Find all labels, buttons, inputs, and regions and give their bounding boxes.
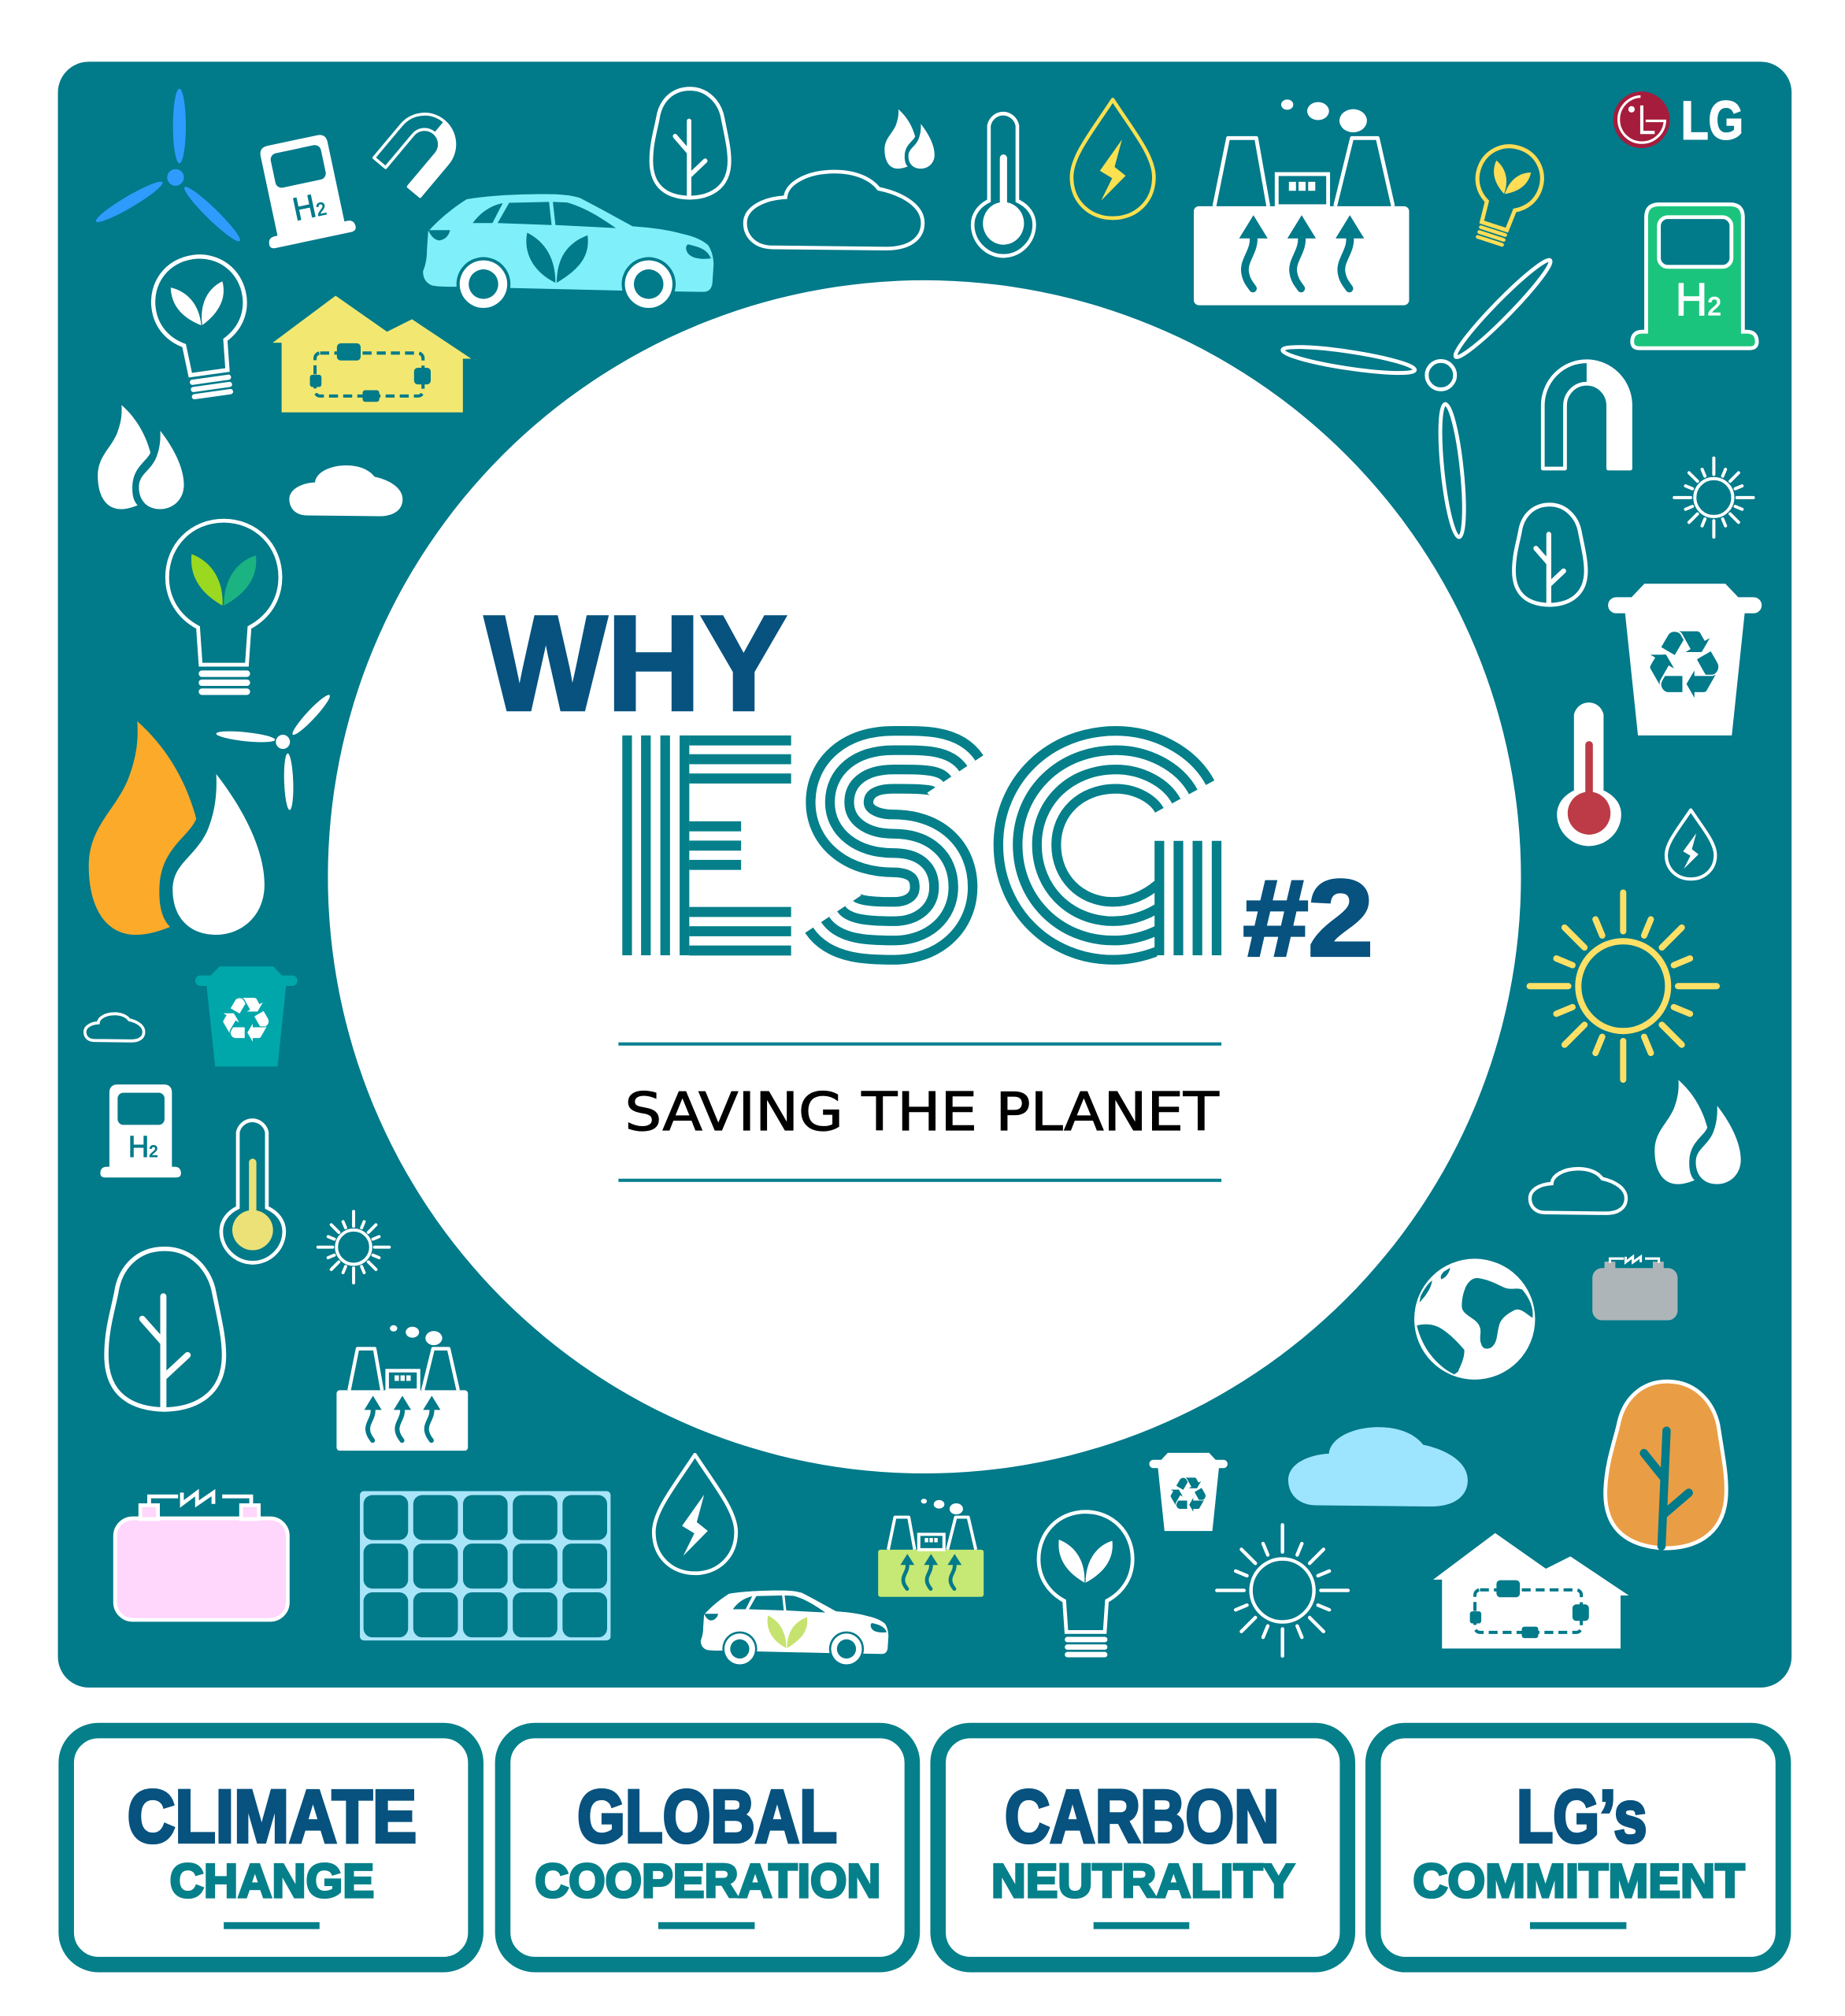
icon: tilted white hydrogen pump — [249, 132, 357, 249]
icon: bottom bulb — [1039, 1512, 1132, 1655]
icon: small white recycling bin — [1149, 1453, 1228, 1531]
panel: Global Cooperation: COOPERATION — [535, 1854, 880, 1907]
letter G — [1028, 760, 1185, 931]
icon: small white gas drops top — [884, 109, 935, 169]
icon: bottom sun — [1217, 1525, 1348, 1656]
icon: white hydrogen pump lower left: H2 — [128, 1130, 158, 1163]
panel: teal icon field — [58, 61, 1791, 1688]
icon: large bulb with green leaves — [167, 521, 280, 691]
title: issue number: #2 — [1243, 858, 1373, 979]
panel: Carbon Neutrality — [938, 1731, 1347, 1965]
logo: LG: LG — [1681, 90, 1743, 150]
letter E — [622, 736, 791, 955]
panel: Climate Change: CHANGE — [170, 1854, 374, 1907]
icon: red thermometer — [1557, 702, 1621, 846]
icon: white hydrogen pump lower left — [100, 1084, 181, 1177]
icon: gray battery — [1594, 1257, 1676, 1319]
icon: tilted magnet — [374, 102, 467, 196]
icon: small green power plant — [878, 1499, 984, 1597]
icon: large outlined tree — [106, 1249, 224, 1410]
icon: blue wind turbine — [93, 89, 244, 245]
icon: teal recycling bin — [195, 966, 298, 1066]
icon: green hydrogen pump — [1632, 205, 1757, 348]
panel: LG's Commitment: LG’s — [1517, 1775, 1647, 1858]
icon: white gas drops right — [1654, 1080, 1741, 1184]
icon: yellow thermometer — [221, 1121, 284, 1262]
icon: solar panel — [360, 1492, 610, 1640]
icon: small white recycling bin: ♻ — [1167, 1467, 1210, 1523]
icon: orange tree — [1603, 1379, 1731, 1551]
icon: white gas drops left — [98, 405, 184, 510]
icon: outlined cloud top — [745, 172, 923, 249]
icon: small power plant left — [336, 1325, 468, 1451]
icon: teal recycling bin: ♻ — [218, 984, 274, 1057]
panel: Climate Change: CLIMATE — [128, 1775, 417, 1858]
icon: top-left bulb — [147, 250, 257, 401]
icon: yellow smart house — [272, 296, 471, 413]
icon: tilted white hydrogen pump: H2 — [290, 186, 328, 228]
logo: LG — [1613, 90, 1743, 150]
subtitle: SAVING THE PLANET — [625, 1081, 1220, 1143]
icon: small sun lower left — [318, 1211, 389, 1283]
panel: Global Cooperation — [502, 1731, 912, 1965]
icon: outlined cloud right — [1530, 1169, 1626, 1214]
icon: white recycling bin: ♻ — [1642, 611, 1726, 721]
icon: white filled cloud — [289, 465, 402, 517]
icon: outlined tree right — [1514, 505, 1586, 605]
center white circle — [328, 280, 1521, 1473]
icon: large yellow sun — [1530, 892, 1717, 1080]
icon: light blue cloud — [1288, 1427, 1468, 1506]
icon: white thermometer — [973, 113, 1034, 256]
icon: yellow lightning drop — [1072, 100, 1154, 218]
title: WHY: WHY — [485, 588, 787, 739]
letter S — [833, 760, 955, 931]
panel: Carbon Neutrality: CARBON — [1005, 1775, 1280, 1858]
icon: small lightning drop right — [1666, 810, 1715, 879]
icon: white recycling bin — [1608, 584, 1762, 736]
icon: small sun top right — [1674, 458, 1754, 537]
panel: Climate Change — [66, 1731, 476, 1965]
icon: small white wind turbine — [216, 692, 333, 810]
panel: Carbon Neutrality: NEUTRALITY — [991, 1854, 1295, 1907]
icon: outlined wind turbine — [1281, 254, 1556, 538]
icon: upright magnet — [1543, 361, 1631, 469]
icon: light blue electric car — [423, 195, 713, 311]
icon: tiny outlined cloud — [85, 1014, 144, 1041]
title: striped ESG lettering — [622, 736, 1221, 955]
panel: Global Cooperation: GLOBAL — [577, 1775, 837, 1858]
panel: LG's Commitment: COMMITMENT — [1413, 1854, 1745, 1907]
icon: outlined tree top — [651, 89, 729, 198]
icon: small yellow bulb — [1459, 138, 1550, 250]
icon: pink battery — [115, 1492, 287, 1620]
icon: globe — [1414, 1258, 1535, 1380]
panel: LG's Commitment — [1373, 1731, 1784, 1965]
icon: white electric car — [701, 1591, 888, 1666]
icon: large orange and white flames — [89, 721, 265, 935]
icon: large white power plant — [1194, 99, 1409, 306]
icon: green hydrogen pump: H2 — [1676, 274, 1721, 325]
icon: lightning drop bottom — [654, 1455, 736, 1573]
icon: white smart house — [1433, 1533, 1628, 1648]
